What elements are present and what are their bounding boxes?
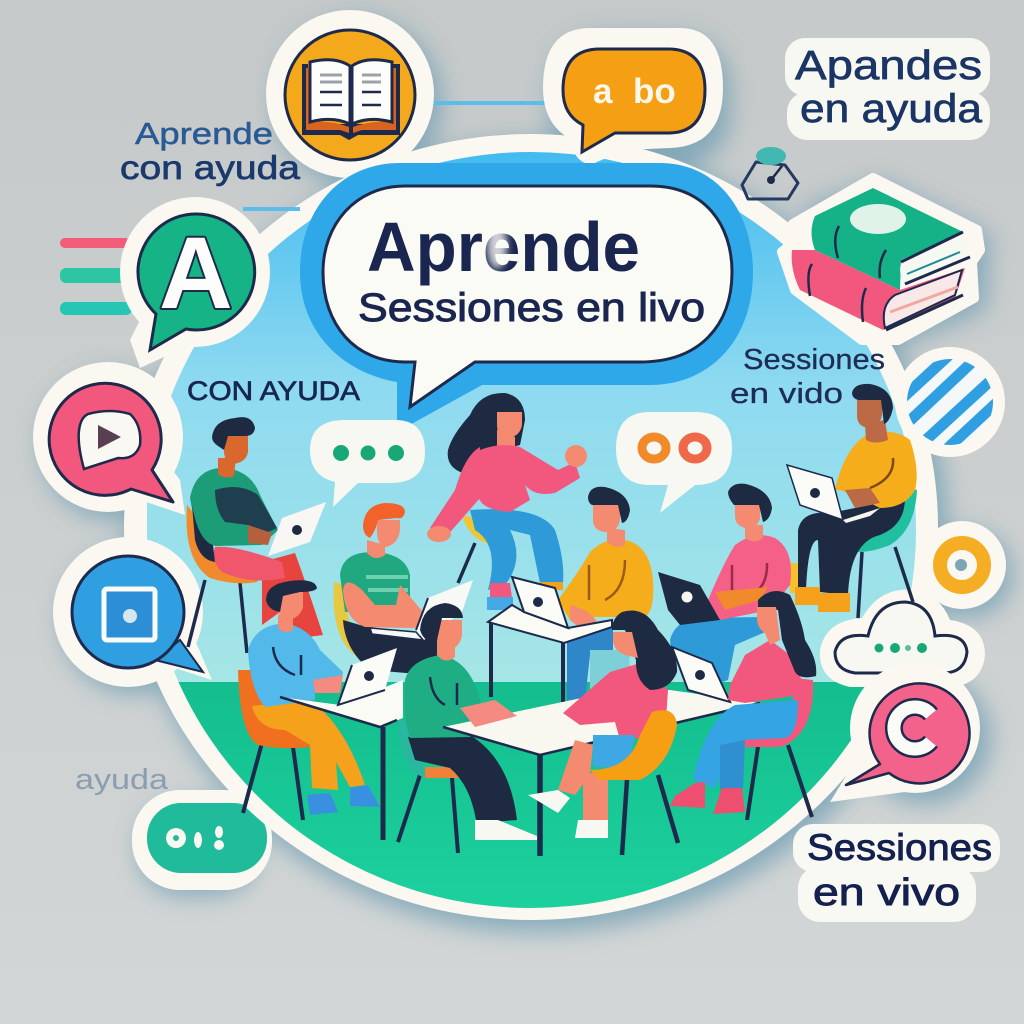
person: striped shirt [334,503,473,675]
top-right label: Apandes [795,42,982,88]
top-right label [785,38,990,140]
top-left label [120,116,301,186]
connector between left stickers [125,505,147,545]
connector under label [243,207,300,211]
main speech bubble [300,163,753,432]
label: ayuda: ayuda [75,764,169,796]
person: green shirt top-left [186,417,326,653]
sticker: letter A bubble: A [159,216,233,330]
sticker: letter C bubble [830,663,980,802]
small node icon [742,147,798,199]
sticker: play bubble [33,362,185,515]
sticker: striped circle [895,345,1005,460]
top-left label: con ayuda [120,149,301,186]
bottom-right label: Sessiones [807,827,992,868]
chat bubble: orange rings [616,412,732,513]
top-right label: en ayuda [800,87,983,131]
label: sesiones en vido: en vido [730,378,843,410]
main scene circle [124,134,938,922]
sticker: yellow ring [918,521,1006,609]
laptop: center [512,577,568,628]
chat bubble: dots [310,420,425,507]
green book [812,188,970,290]
top-left label: Aprende [135,116,273,151]
person: green shirt front [398,603,537,853]
label: sesiones en vido [730,344,885,410]
bottom-right label: en vivo [813,872,960,914]
person: long hair right front [670,591,816,820]
sticker: letter A bubble [60,197,270,368]
label: con ayuda: CON AYUDA [187,376,360,406]
person: pink sweater right [658,484,798,690]
sticker: orange speech bubble: a [593,72,613,111]
sticker: blue screen bubble [53,537,212,687]
green chat pill sticker [132,790,272,890]
person: teacher [427,393,587,610]
sticker: orange speech bubble [543,28,723,165]
person: yellow sweater center [558,487,653,700]
connector between stickers [433,101,548,105]
pink book [792,250,965,330]
person: blue shirt front-left [238,580,403,840]
table: center back [488,605,612,702]
laptop: right [672,647,730,702]
smudge in heading [487,221,507,269]
table: center front [443,690,760,856]
sticker: stacked books [782,178,980,340]
label: sesiones en vido: Sessiones [743,344,885,376]
person: yellow shirt top-right [787,384,917,618]
bottom-right label [793,824,1000,922]
person: long hair pink shirt front [528,610,678,855]
bubble heading: Aprende [367,208,640,286]
sticker: orange speech bubble: bo [633,72,676,111]
bubble subheading: Sessiones en livo [358,286,705,330]
sticker: cloud [820,590,985,687]
sticker: open book [266,10,434,178]
